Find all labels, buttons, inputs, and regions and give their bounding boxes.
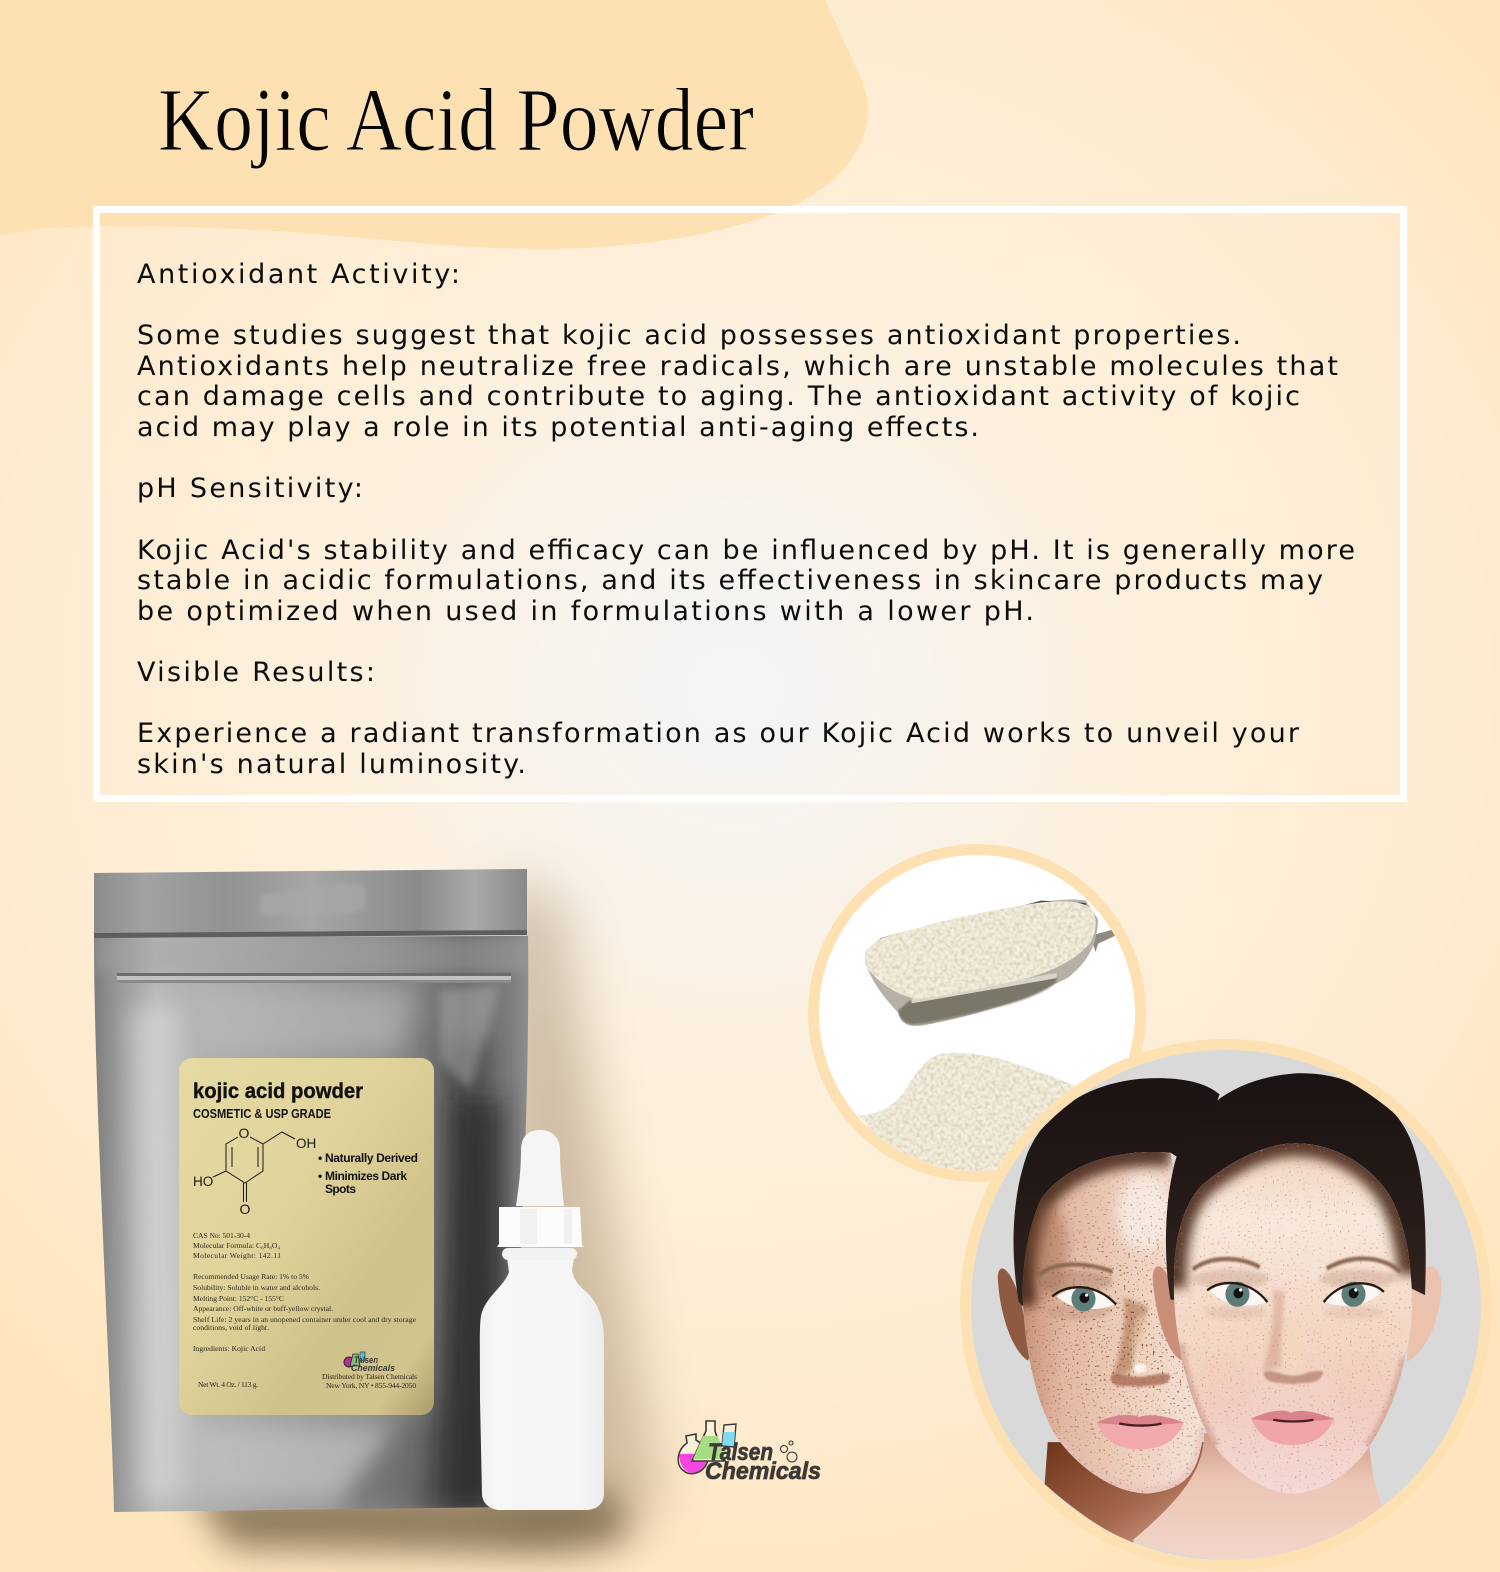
label specifications: New York, NY • 855-944-2050 [326,1381,416,1390]
icon: kojic acid molecule [193,1125,316,1217]
logo wordmark: Chemicals [705,1458,821,1485]
bottle body [480,1258,604,1510]
text block: antioxidant paragraph: Antioxidants help neutralize free radicals, which are unstable molecules that [137,351,1338,382]
icon: kojic acid molecule: O [240,1201,250,1217]
icon: small Talsen logo [344,1352,395,1374]
label specifications [193,1231,417,1390]
label bullets: • [318,1151,322,1165]
label bullets: Naturally Derived [325,1151,418,1165]
text block: pH paragraph: be optimized when used in formulations with a lower pH. [137,596,1034,627]
face after treatment [1133,1073,1441,1568]
left eye [1039,1264,1116,1311]
label specifications: Distributed by Talsen Chemicals [322,1372,417,1381]
scoop [858,896,1115,1026]
label heading: kojic acid powder [193,1080,363,1103]
decorative header blob [0,0,868,249]
jar [722,1424,736,1447]
pouch body [94,936,528,1512]
label specifications: Net Wt. 4 Oz. / 113 g. [198,1380,258,1389]
label specifications: Ingredients: Kojic Acid [193,1344,265,1353]
panel: white frame with description text [96,210,1404,798]
text block: antioxidant paragraph: Some studies suggest that kojic acid possesses antioxidant properties. [137,320,1241,351]
title: Kojic Acid Powder [158,71,754,170]
logo wordmark [705,1439,821,1485]
bottle cap [497,1207,584,1247]
powder pile [858,1053,1075,1171]
icon: small Talsen logo: Talsen [354,1355,378,1366]
icon: kojic acid molecule: HO [193,1174,213,1189]
text block: antioxidant paragraph: acid may play a role in its potential anti-aging effects. [137,412,979,443]
heading: pH sensitivity: pH Sensitivity: [137,473,363,504]
label bullets: Spots [325,1182,356,1196]
right face eyes [1193,1259,1400,1307]
text block: visible results paragraph [137,718,1300,780]
label specifications: CAS No: 501-30-4 [193,1231,250,1240]
face with freckles (before) [998,1078,1220,1543]
gold label [179,1058,434,1415]
heading: visible results: Visible Results: [137,657,375,688]
bottle bulb [516,1130,564,1206]
bubbles [780,1441,797,1462]
logo wordmark: Talsen [708,1439,773,1466]
text block: visible results paragraph: skin's natural luminosity. [137,749,526,780]
left nose and lips [1097,1364,1184,1449]
label grade: COSMETIC & USP GRADE [193,1106,331,1121]
label bullets: Minimizes Dark [325,1169,407,1183]
text block: pH paragraph: Kojic Acid's stability and efficacy can be influenced by pH. It is generally more [137,535,1355,566]
logo: Talsen Chemicals [678,1421,821,1485]
label specifications: Shelf Life: 2 years in an unopened container under cool and dry storage [193,1315,417,1324]
icon: kojic acid molecule: OH [296,1136,316,1151]
label specifications: Recommended Usage Rate: 1% to 5% [193,1272,310,1281]
label bullets [318,1151,418,1196]
pouch top band [94,869,527,936]
label bullets: • [318,1169,322,1183]
text block: antioxidant paragraph [137,320,1338,443]
photo circle: kojic acid powder in scoop [808,844,1146,1182]
text block: antioxidant paragraph: can damage cells and contribute to aging. The antioxidant activity of kojic [137,381,1300,412]
label specifications: conditions, void of light. [193,1323,269,1332]
conical flask [692,1421,725,1461]
icon: kojic acid molecule: O [238,1125,250,1141]
label specifications: Molecular Formula: C₆H₈O₄ [193,1241,280,1250]
label specifications: Molecular Weight: 142.11 [193,1251,281,1260]
product: white dropper bottle [480,1130,604,1510]
product: foil pouch [94,869,528,1512]
label specifications: Solubility: Soluble in water and alcohols. [193,1283,320,1292]
text block: pH paragraph: stable in acidic formulations, and its effectiveness in skincare products may [137,565,1323,596]
round flask [678,1434,708,1474]
label specifications: Appearance: Off-white or buff-yellow crystal. [193,1304,333,1313]
icon: small Talsen logo: Chemicals [351,1363,395,1374]
product shadow [190,880,660,1553]
photo circle: before and after skin comparison [960,1039,1492,1571]
text block: pH paragraph [137,535,1355,627]
right face nose and lips [1251,1371,1334,1445]
label specifications: Melting Point: 152°C - 155°C [193,1294,284,1303]
text block: visible results paragraph: Experience a radiant transformation as our Kojic Acid works to unveil your [137,718,1300,749]
heading: antioxidant activity: Antioxidant Activity: [137,259,460,290]
